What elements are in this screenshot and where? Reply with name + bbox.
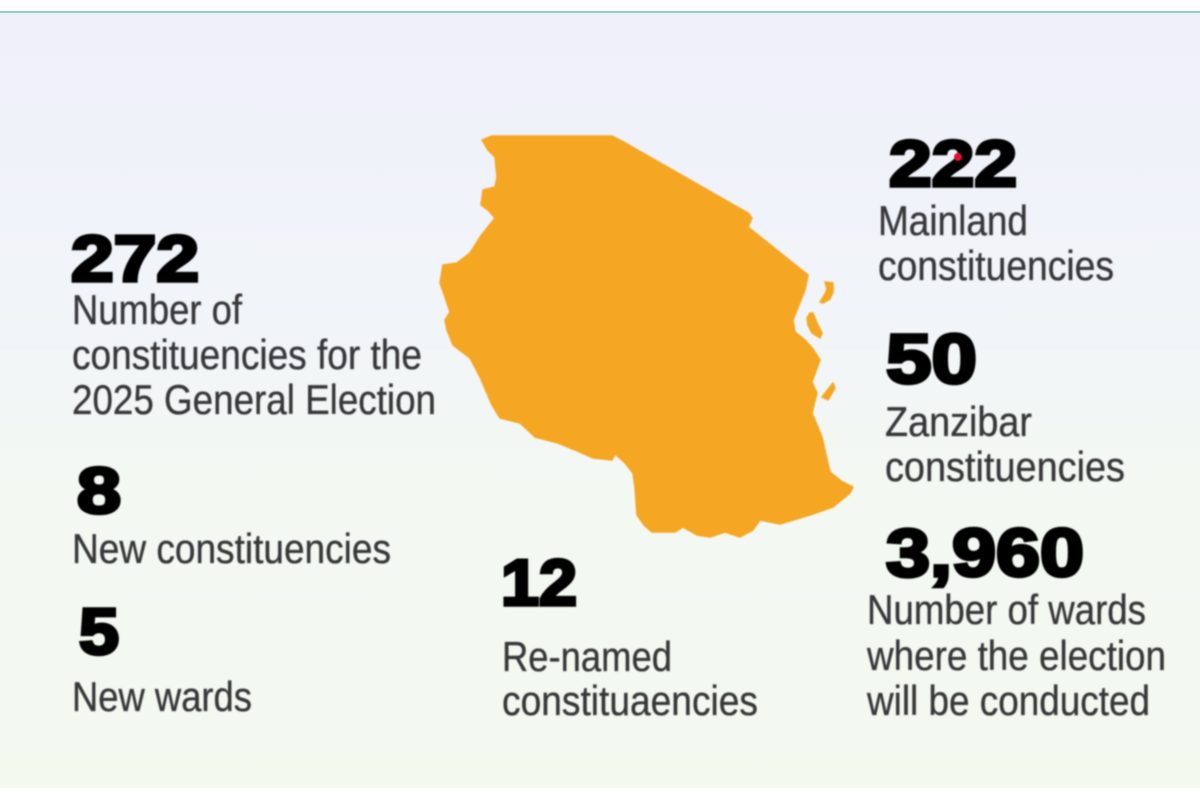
- stat: 50 Zanzibar constituencies: constituencies: [885, 443, 1125, 490]
- stat: 222 mainland constituencies: [878, 127, 1114, 289]
- stat: 3,960 wards: Number of wards: [867, 586, 1146, 633]
- stat: 3,960 wards: 3,960: [886, 515, 1084, 591]
- stat: 12 re-named constituencies: Re-named: [502, 633, 672, 680]
- stat: 5 new wards: [72, 595, 252, 720]
- stat: 3,960 wards: where the election: [866, 632, 1166, 679]
- stat: 12 re-named constituencies: 12: [501, 546, 577, 619]
- stat: 222 mainland constituencies: Mainland: [878, 197, 1028, 244]
- stat: 12 re-named constituencies: [501, 546, 758, 724]
- stat: 8 new constituencies: [72, 454, 391, 572]
- stat: 272 constituencies: [71, 222, 436, 423]
- stat: 50 Zanzibar constituencies: Zanzibar: [885, 398, 1032, 445]
- stat: 5 new wards: New wards: [72, 673, 252, 720]
- stat: 50 Zanzibar constituencies: [885, 320, 1125, 490]
- stat: 8 new constituencies: New constituencies: [72, 525, 391, 572]
- stat: 50 Zanzibar constituencies: 50: [886, 320, 977, 398]
- stat: 3,960 wards: will be conducted: [866, 677, 1150, 724]
- stat: 8 new constituencies: 8: [77, 454, 121, 527]
- stat: 272 constituencies: 272: [71, 222, 199, 295]
- map of Tanzania: [440, 136, 853, 537]
- stat: 222 mainland constituencies: 222: [889, 127, 1017, 200]
- stat: 222 mainland constituencies: constituencies: [878, 242, 1114, 289]
- stat: 3,960 wards: [866, 515, 1166, 724]
- stat: 5 new wards: 5: [79, 595, 119, 668]
- stat: 12 re-named constituencies: constituaencies: [502, 677, 758, 724]
- stat: 272 constituencies: 2025 General Election: [72, 376, 436, 423]
- stat: 272 constituencies: Number of: [72, 286, 242, 333]
- stat: 272 constituencies: constituencies for the: [72, 331, 422, 378]
